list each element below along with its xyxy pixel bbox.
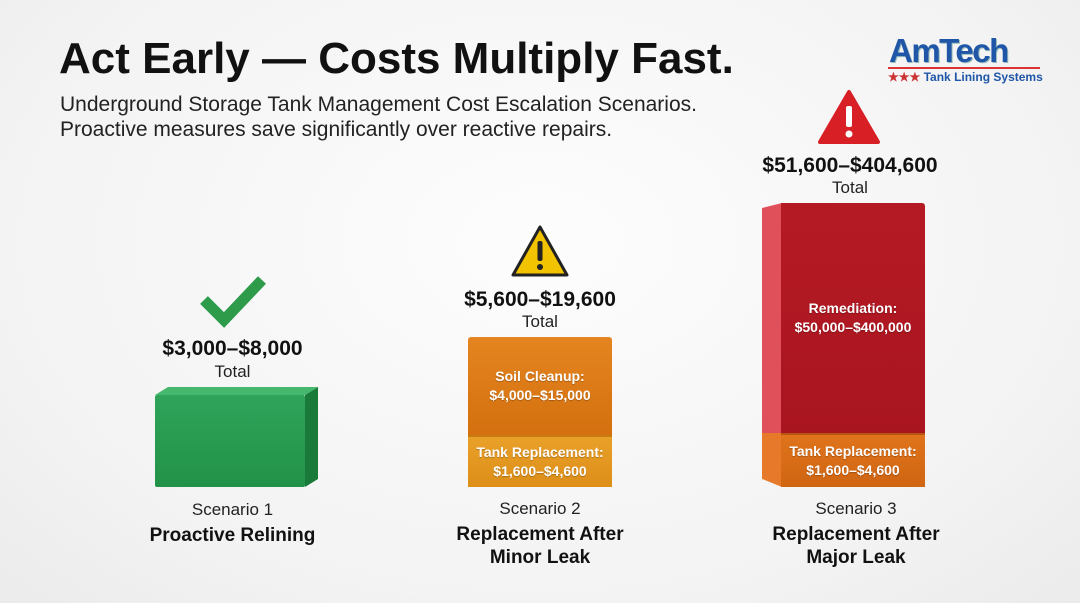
total: Total <box>215 362 250 381</box>
scenario 3 <box>762 90 940 568</box>
subtitle: Underground Storage Tank Management Cost Escalation Scenarios. <box>60 93 697 116</box>
label: Scenario 2 <box>499 499 581 518</box>
scenario 1 <box>150 276 318 546</box>
bar <box>762 203 925 487</box>
label: Proactive Relining <box>150 525 315 546</box>
label <box>456 499 624 568</box>
segment: tank replacement: $1,600–$4,600 <box>493 463 587 479</box>
icon: check <box>200 276 266 328</box>
bar <box>155 387 318 487</box>
total: Total <box>832 178 868 197</box>
label: Replacement After <box>772 524 940 545</box>
segment: tank replacement: Tank Replacement: <box>476 444 604 460</box>
scenario 2 <box>456 225 624 568</box>
title: Act Early — Costs Multiply Fast. <box>59 34 734 83</box>
icon: warning <box>512 225 569 276</box>
label <box>150 500 315 546</box>
logo <box>888 32 1043 84</box>
logo: ★★★ Tank Lining Systems <box>888 70 1043 84</box>
segment: tank replacement: $1,600–$4,600 <box>806 462 900 478</box>
label: Scenario 1 <box>192 500 273 519</box>
segment: tank replacement <box>468 435 612 487</box>
subtitle: Proactive measures save significantly over reactive repairs. <box>60 118 612 141</box>
segment: soil cleanup: $4,000–$15,000 <box>489 387 591 403</box>
price: $3,000–$8,000 <box>162 337 303 360</box>
segment: remediation: $50,000–$400,000 <box>795 319 911 335</box>
label: Minor Leak <box>490 547 590 568</box>
logo: AmTech <box>889 32 1008 69</box>
label: Major Leak <box>806 547 906 568</box>
icon: alert <box>818 90 880 144</box>
total: Total <box>522 312 558 331</box>
price: $51,600–$404,600 <box>762 154 938 177</box>
segment: soil cleanup <box>468 337 612 435</box>
subtitle <box>60 93 697 141</box>
segment: remediation: Remediation: <box>809 300 897 316</box>
bar <box>468 337 612 487</box>
segment: soil cleanup: Soil Cleanup: <box>495 368 585 384</box>
label: Replacement After <box>456 524 624 545</box>
segment: tank replacement <box>781 433 925 487</box>
label <box>772 499 940 568</box>
segment: tank replacement: Tank Replacement: <box>789 443 917 459</box>
segment: remediation <box>781 203 925 433</box>
price: $5,600–$19,600 <box>464 288 616 311</box>
label: Scenario 3 <box>815 499 897 518</box>
